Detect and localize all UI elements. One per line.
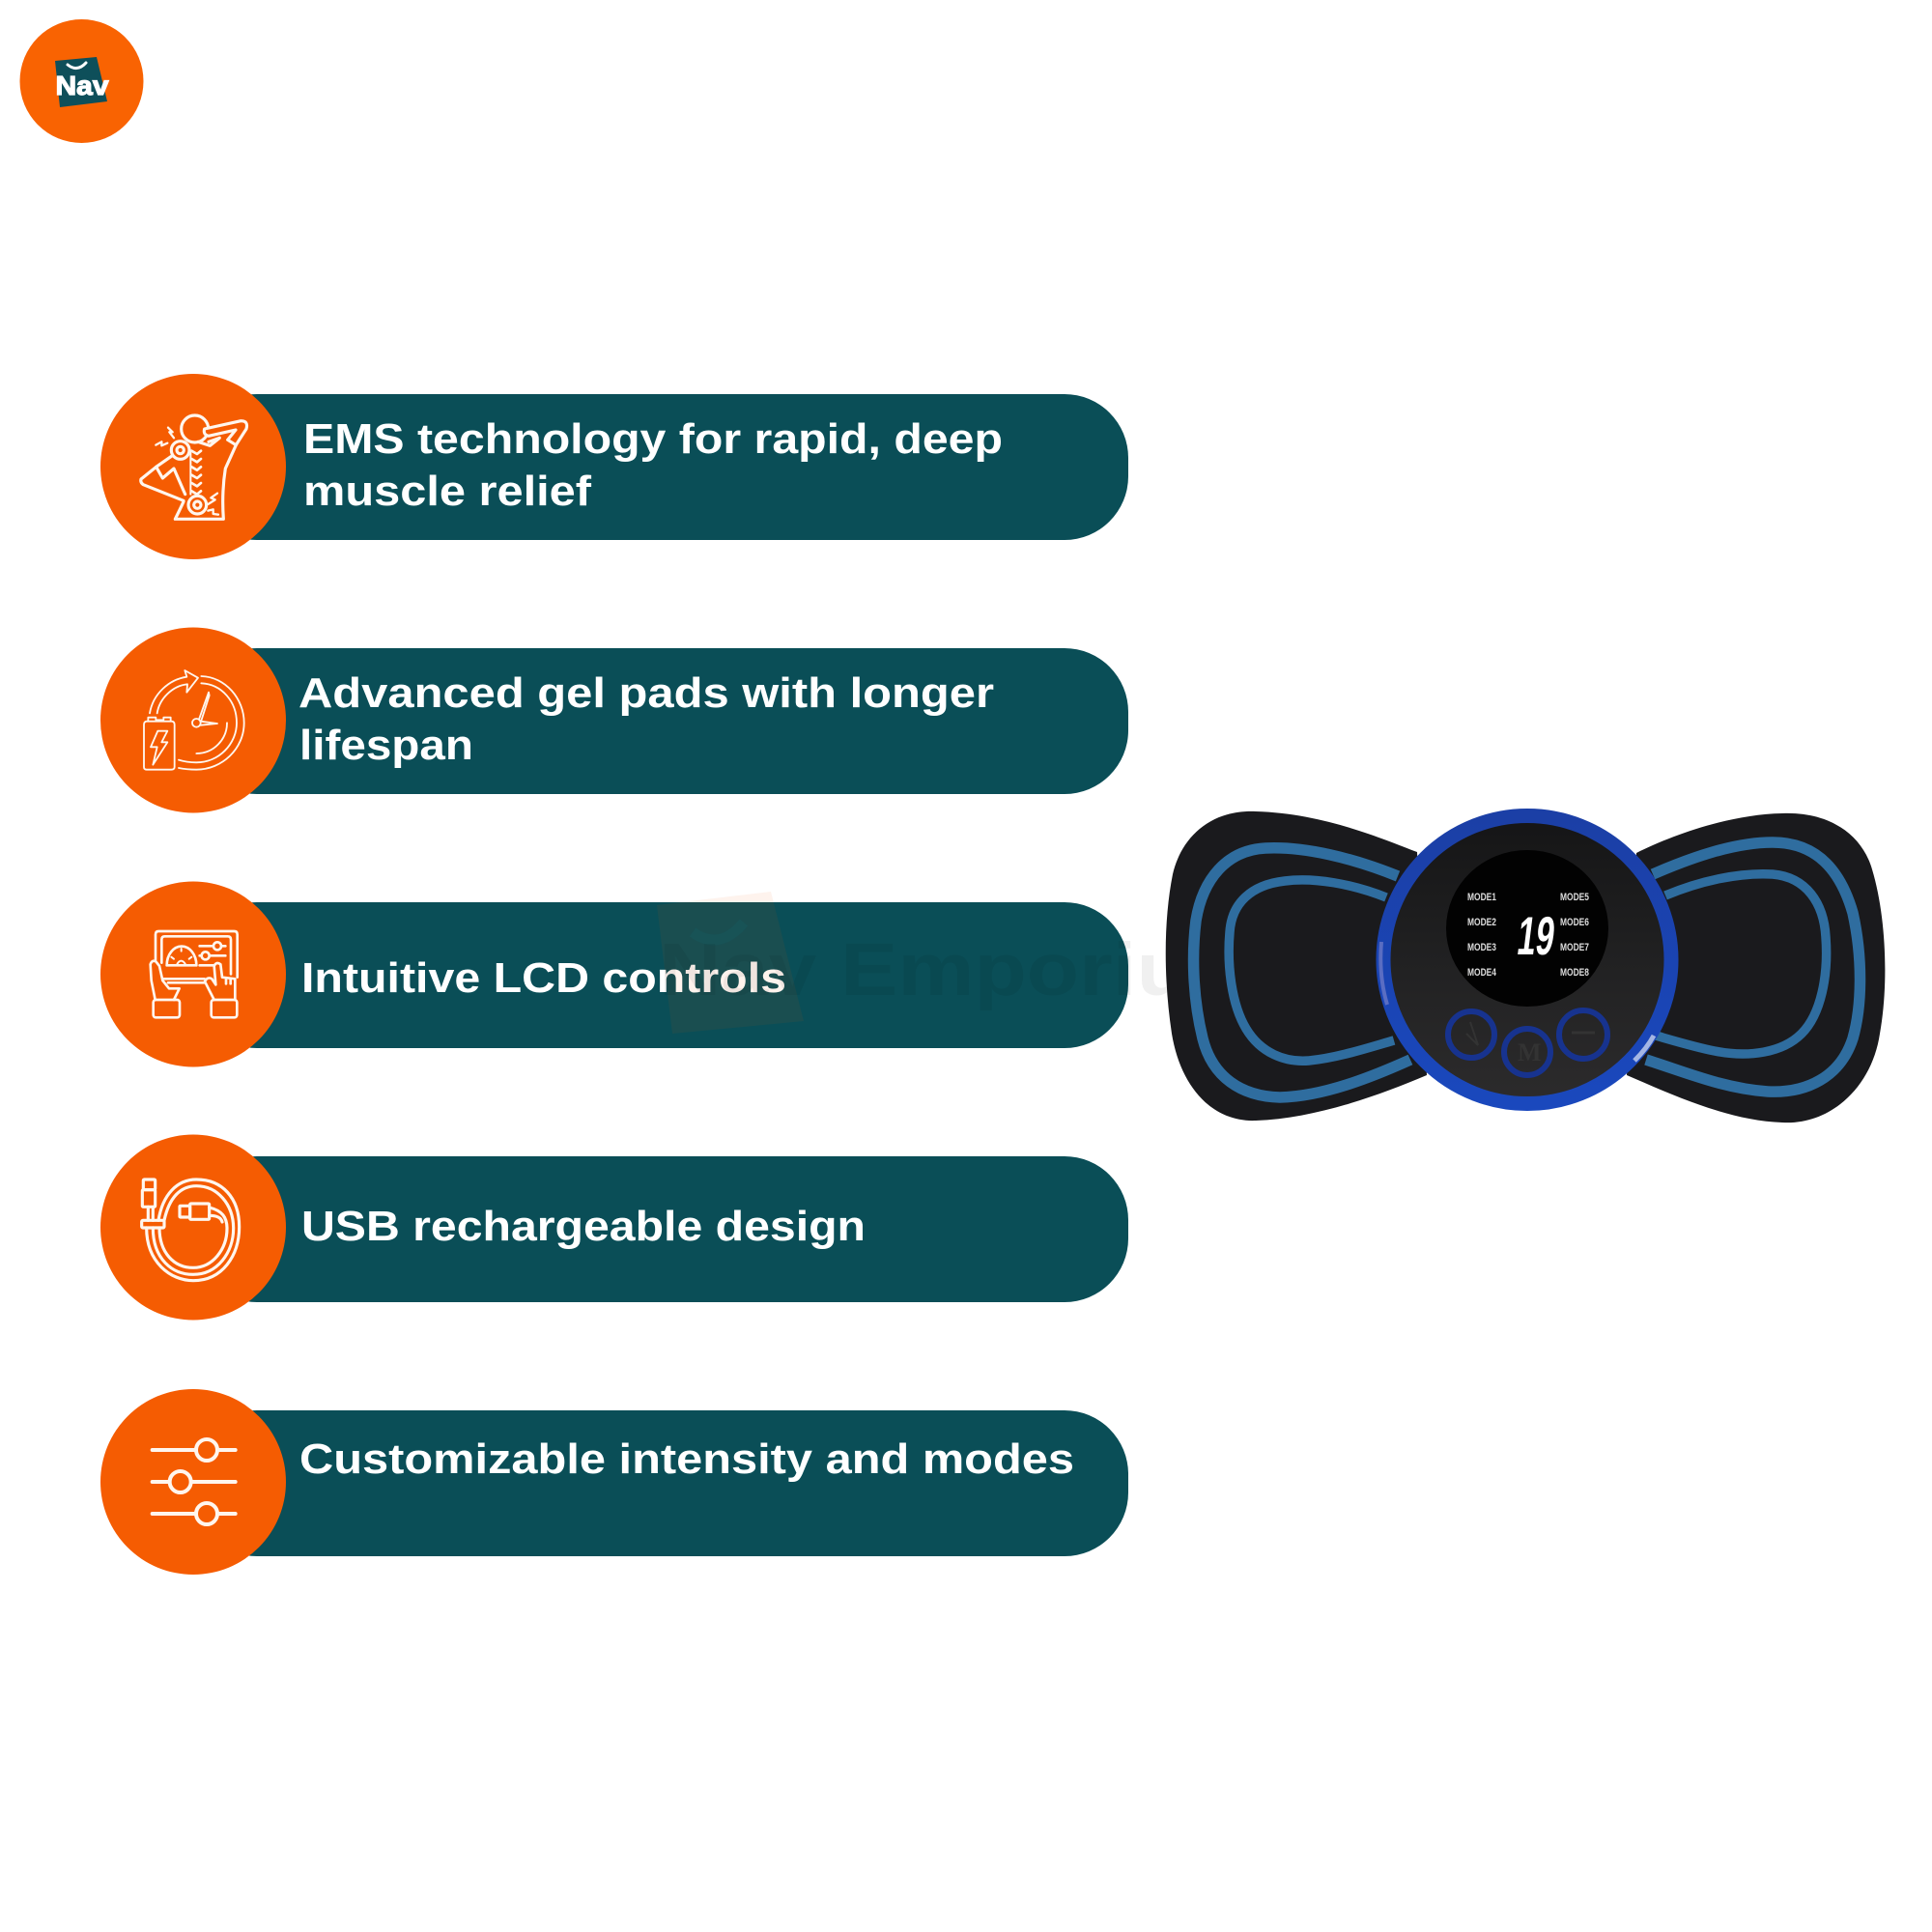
mode labels: MODE1 <box>1467 892 1496 903</box>
icon circle 4 <box>100 1134 286 1320</box>
mode labels <box>1467 892 1589 979</box>
logo <box>19 19 143 143</box>
bar 4 text: USB rechargeable design <box>301 1203 866 1250</box>
icon circle 1 <box>100 374 286 559</box>
feature 5: intensity and modes <box>100 1389 1128 1575</box>
mode labels: MODE3 <box>1467 942 1496 953</box>
mode labels: MODE2 <box>1467 917 1496 928</box>
bar 1 <box>193 394 1128 540</box>
feature 4: USB rechargeable <box>100 1134 1128 1320</box>
mode labels: MODE8 <box>1560 967 1589 979</box>
icon circle 2 <box>100 628 286 813</box>
bar 2 text: Advanced gel pads with longer <box>298 669 994 717</box>
buttons: M <box>1518 1038 1542 1066</box>
mode labels: MODE5 <box>1560 892 1589 903</box>
bar 2 <box>193 648 1128 794</box>
bar 3 text: Intuitive LCD controls <box>301 954 786 1002</box>
bar 1 text: muscle relief <box>303 468 591 515</box>
bar 4 <box>193 1156 1128 1302</box>
icon: back pain <box>141 415 247 519</box>
icon: battery clock <box>144 670 244 770</box>
icon circle 5 <box>100 1389 286 1575</box>
icon: LCD tablet <box>151 931 238 1017</box>
mode labels: MODE6 <box>1560 917 1589 928</box>
bar 1 text <box>303 415 1003 515</box>
controller body <box>1380 815 1671 1103</box>
right wing <box>1627 813 1885 1122</box>
feature 2: gel pads <box>100 628 1128 813</box>
logo: Nav <box>56 71 109 100</box>
LCD screen <box>1446 850 1608 1007</box>
bar 2 text: lifespan <box>299 722 473 769</box>
feature 1: EMS technology <box>100 374 1128 559</box>
mode labels: MODE7 <box>1560 942 1589 953</box>
left wing <box>1166 811 1427 1121</box>
buttons <box>1448 1010 1607 1075</box>
bar 3 <box>193 902 1128 1048</box>
watermark <box>657 892 1265 1034</box>
digits: 19 <box>1515 905 1558 966</box>
bar 2 text <box>298 669 994 769</box>
bar 1 text: EMS technology for rapid, deep <box>303 415 1003 463</box>
watermark: Nav Emporium <box>659 928 1265 1011</box>
feature 3: LCD controls <box>100 881 1128 1066</box>
bar 5 text: Customizable intensity and modes <box>299 1435 1074 1483</box>
icon: sliders <box>153 1439 236 1524</box>
bar 5 <box>193 1410 1128 1556</box>
icon circle 3 <box>100 881 286 1066</box>
icon: USB cable <box>142 1179 240 1281</box>
product: butterfly massager <box>1166 811 1885 1122</box>
mode labels: MODE4 <box>1467 967 1497 979</box>
